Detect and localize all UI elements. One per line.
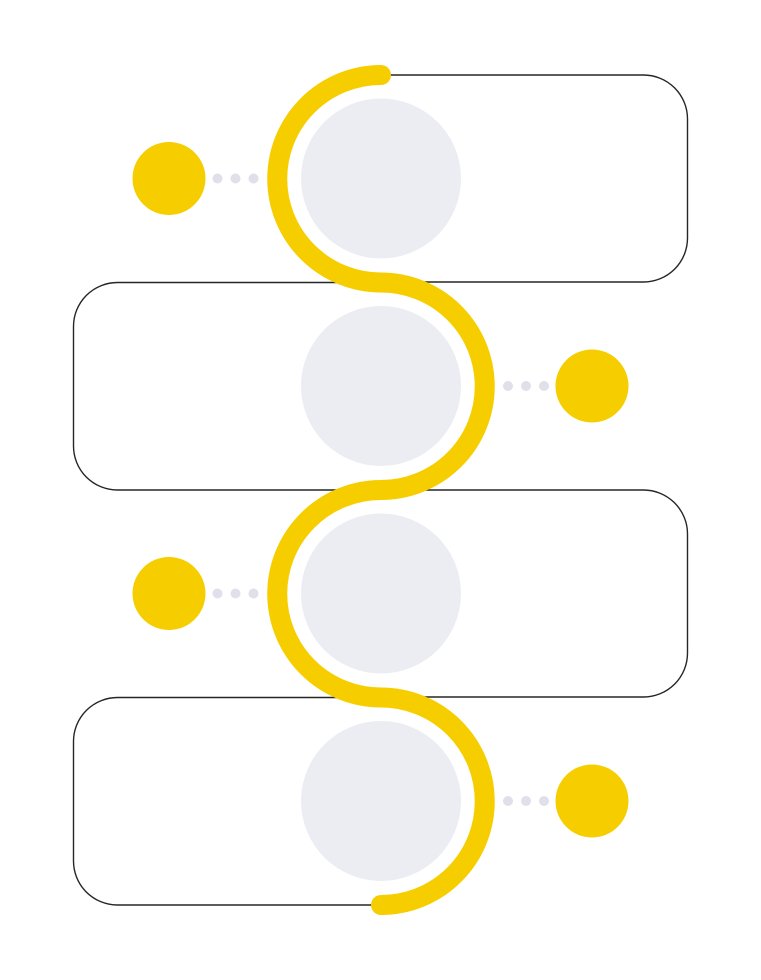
marker: step 4 yellow dot <box>556 764 628 838</box>
panel: step 4 outline box <box>74 698 380 905</box>
dotted link: step 1 <box>212 174 258 184</box>
circle: step 2 content placeholder <box>301 306 461 466</box>
marker: step 1 yellow dot <box>132 142 206 215</box>
circle: step 4 content placeholder <box>301 721 461 881</box>
panel: step 2 outline box <box>74 282 380 490</box>
dotted link: step 4 <box>503 796 549 806</box>
serpentine yellow connector <box>277 75 485 905</box>
panel: step 3 outline box <box>380 490 688 697</box>
panel: step 1 outline box <box>380 75 688 282</box>
marker: step 3 yellow dot <box>132 557 206 630</box>
dotted link: step 2 <box>503 381 549 391</box>
dotted link: step 3 <box>212 588 258 598</box>
circle: step 3 content placeholder <box>301 514 461 674</box>
circle: step 1 content placeholder <box>301 98 461 258</box>
marker: step 2 yellow dot <box>556 350 628 422</box>
